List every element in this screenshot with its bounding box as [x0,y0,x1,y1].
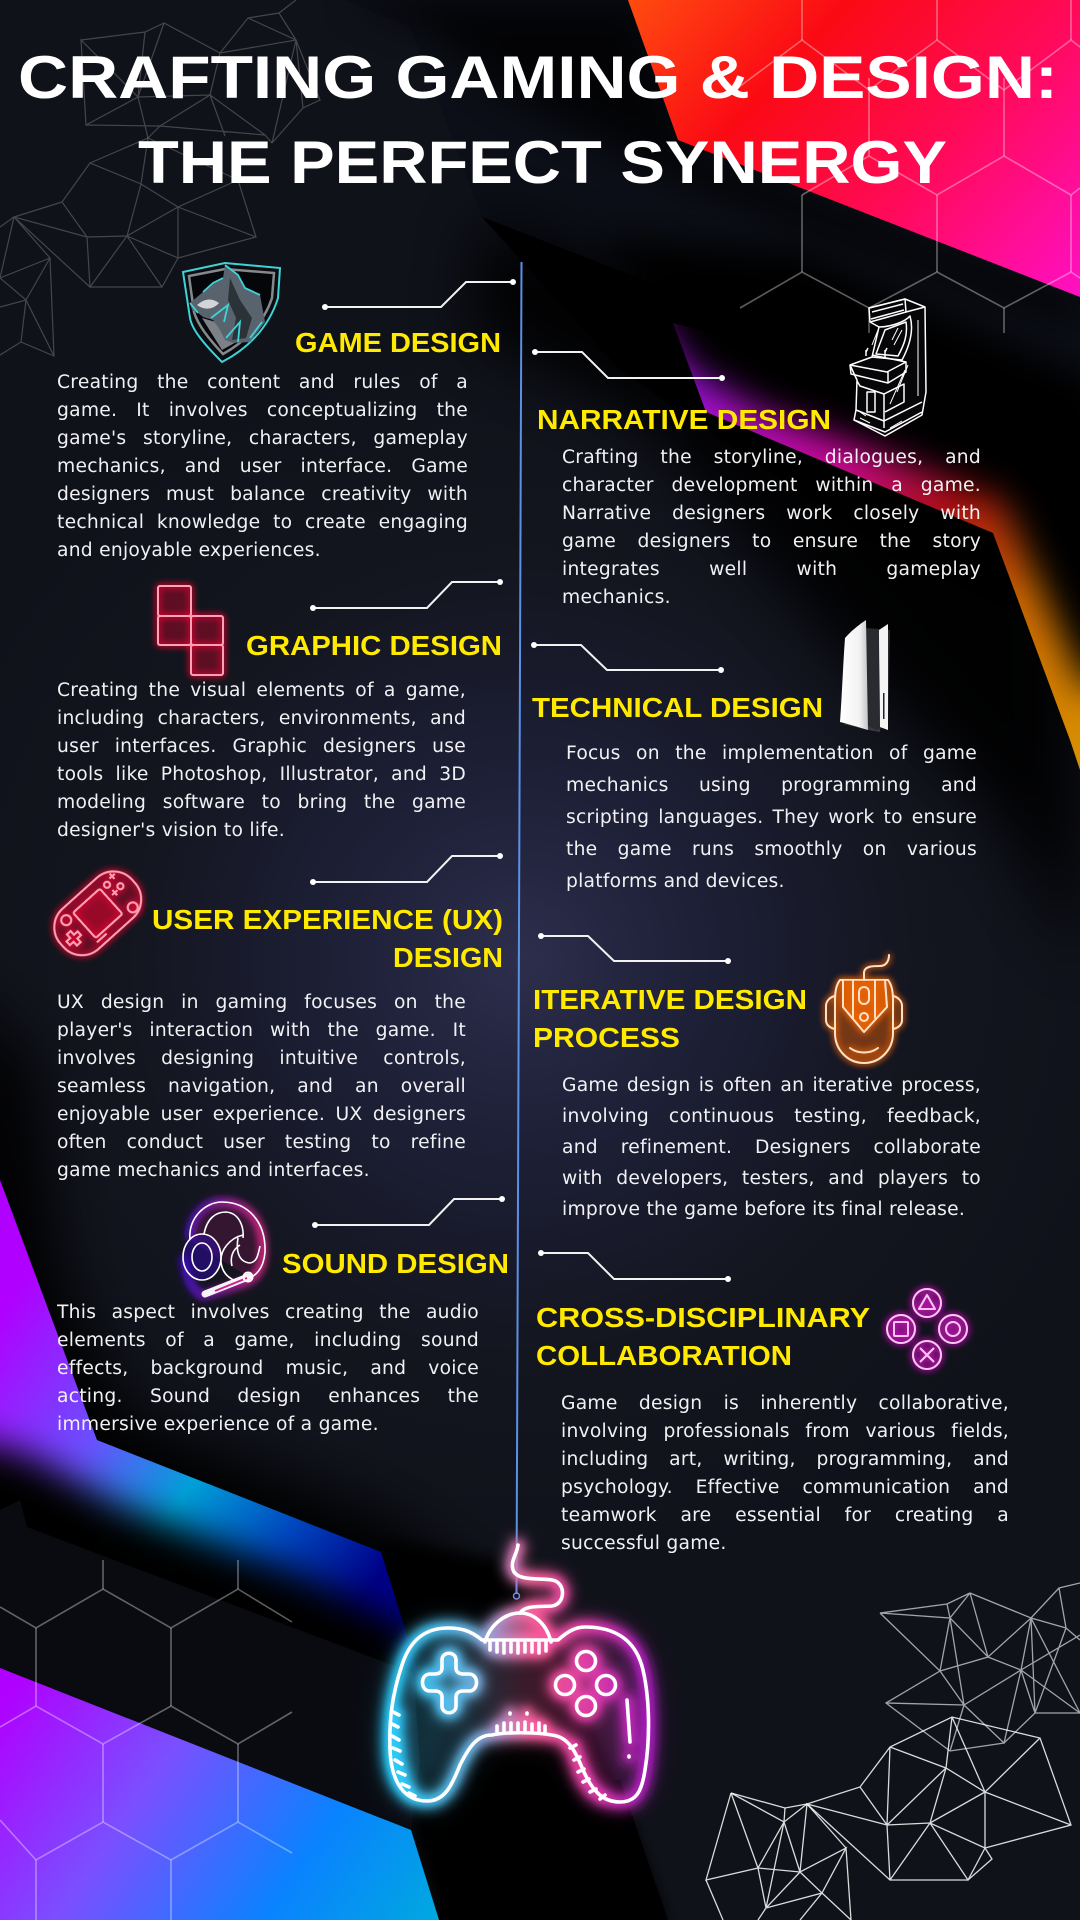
body text: and refinement. Designers collaborate [562,1137,981,1158]
body text: modeling software to bring the game [57,792,466,813]
mid left colour stripe [0,1180,430,1830]
body text [562,444,981,612]
body text: with developers, testers, and players to [562,1168,981,1189]
body text [57,989,466,1185]
body text: designers must balance creativity with [57,484,468,505]
body text: mechanics. [562,587,671,608]
connector [532,349,725,381]
heading: DESIGN [393,942,503,973]
body text: effects, background music, and voice [57,1358,479,1379]
section: technical design [531,620,977,898]
body text [566,738,977,898]
body text: technical knowledge to create engaging [57,512,468,533]
body text: psychology. Effective communication and [561,1477,1009,1498]
body text: and enjoyable experiences. [57,540,321,561]
body text: scripting languages. They work to ensure [566,807,977,828]
body text: character development within a game. [562,475,981,496]
icon: neon controller buttons [887,1289,967,1369]
heading [536,1302,870,1371]
body text: mechanics using programming and [566,775,977,796]
section: iterative design process [533,933,981,1225]
body text: successful game. [561,1533,727,1554]
body text: seamless navigation, and an overall [57,1076,466,1097]
body text: acting. Sound design enhances the [57,1386,479,1407]
section: user experience design [44,853,503,1185]
heading: PROCESS [533,1022,680,1053]
low-poly mesh bottom right [706,1583,1080,1920]
icon: neon tetris block [158,586,223,675]
body text: game mechanics and interfaces. [57,1160,370,1181]
upper black shadow band [344,0,1080,960]
title: CRAFTING GAMING & DESIGN: [18,44,1058,111]
section: sound design [57,1196,509,1439]
body text: Creating the visual elements of a game, [57,680,466,701]
body text: game's storyline, characters, gameplay [57,428,468,449]
connector [538,1250,731,1282]
section: graphic design [57,579,503,845]
central timeline line [516,262,522,1594]
connector [312,1196,505,1228]
title [18,44,1058,196]
body text: platforms and devices. [566,871,785,892]
section: narrative design [532,299,981,612]
hexagon grid bottom left [0,1560,292,1920]
body text: Game design is inherently collaborative, [561,1393,1009,1414]
top right red gradient shape [628,0,1080,297]
body text: Narrative designers work closely with [562,503,981,524]
body text: game designers to ensure the story [562,531,981,552]
body text: Creating the content and rules of a [57,372,468,393]
body text [561,1390,1009,1558]
body text [57,1299,479,1439]
body text: Game design is often an iterative process, [562,1075,981,1096]
body text: UX design in gaming focuses on the [57,992,466,1013]
body text: involving professionals from various fields, [561,1421,1009,1442]
connector [538,933,731,964]
body text: elements of a game, including sound [57,1330,479,1351]
icon: neon headset [183,1202,265,1296]
icon: neon gaming mouse [826,955,902,1063]
body text: often conduct user testing to refine [57,1132,466,1153]
icon: game console tower [840,620,890,732]
body text [57,677,466,845]
heading [152,904,503,973]
body text: designer's vision to life. [57,820,285,841]
icon: neon handheld console [44,861,151,966]
heading: NARRATIVE DESIGN [537,404,831,435]
connector [531,642,724,673]
icon: wolf shield [183,263,280,362]
body text: tools like Photoshop, Illustrator, and 3D [57,764,466,785]
body text: teamwork are essential for creating a [561,1505,1009,1526]
section: game design [57,263,516,565]
heading: GRAPHIC DESIGN [246,630,502,661]
body text: involves designing intuitive controls, [57,1048,466,1069]
heading: USER EXPERIENCE (UX) [152,904,503,935]
body text: improve the game before its final release. [562,1199,965,1220]
body text: mechanics, and user interface. Game [57,456,468,477]
title: THE PERFECT SYNERGY [138,129,947,196]
body text: involving continuous testing, feedback, [562,1106,981,1127]
body text: player's interaction with the game. It [57,1020,466,1041]
heading: TECHNICAL DESIGN [532,692,823,723]
connector [310,579,503,611]
body text: enjoyable user experience. UX designers [57,1104,466,1125]
heading: ITERATIVE DESIGN [533,984,807,1015]
heading: COLLABORATION [536,1340,792,1371]
body text: user interfaces. Graphic designers use [57,736,466,757]
body text: game. It involves conceptualizing the [57,400,468,421]
connector [310,853,503,885]
body text: This aspect involves creating the audio [57,1302,479,1323]
heading: SOUND DESIGN [282,1248,509,1279]
connector [322,279,516,310]
body text [57,369,468,565]
low-poly mesh top left [0,0,320,356]
bottom left blue gradient shape [0,1668,439,1920]
icon: arcade cabinet [850,299,926,436]
body text: Crafting the storyline, dialogues, and [562,447,981,468]
body text: the game runs smoothly on various [566,839,977,860]
icon: neon game controller [390,1545,649,1802]
body text: immersive experience of a game. [57,1414,379,1435]
body text: Focus on the implementation of game [566,743,977,764]
section: cross-disciplinary collaboration [536,1250,1009,1558]
heading [533,984,807,1053]
body text: including characters, environments, and [57,708,466,729]
body text [562,1070,981,1225]
body text: integrates well with gameplay [562,559,981,580]
heading: GAME DESIGN [295,327,501,358]
left and lower black shadows [0,980,668,1920]
heading: CROSS-DISCIPLINARY [536,1302,870,1333]
hexagon grid top right [735,0,1080,333]
middle right colour stripe [600,240,1080,770]
body text: including art, writing, programming, and [561,1449,1009,1470]
